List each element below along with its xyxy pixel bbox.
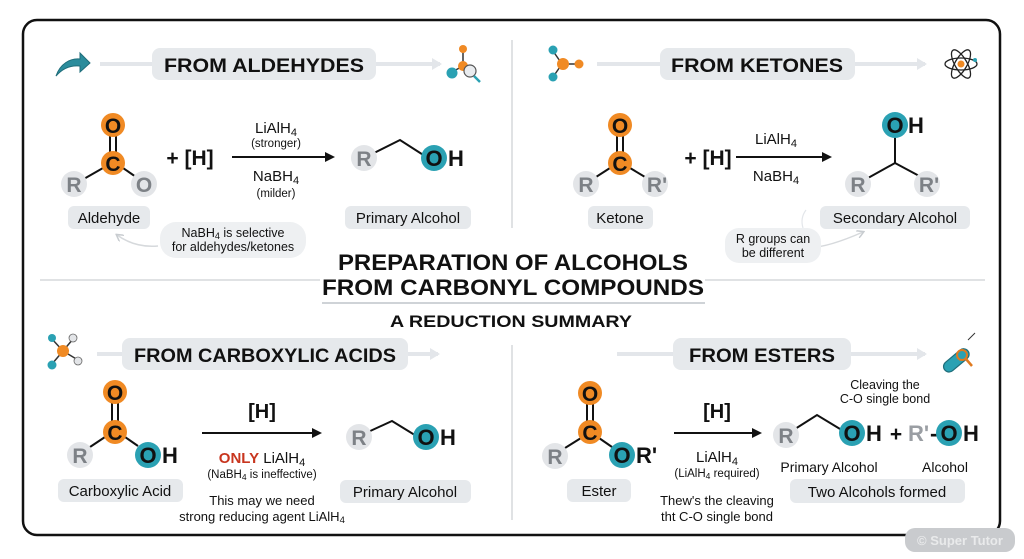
carboxylic acid molecule: C xyxy=(107,422,123,445)
ketone molecule xyxy=(573,113,668,197)
arrow: ester reduction: required) xyxy=(710,468,760,480)
arrow: acid reduction: 4 xyxy=(242,472,247,482)
aldehyde molecule: O xyxy=(105,115,121,138)
panel: esters xyxy=(542,333,979,524)
title: A REDUCTION SUMMARY xyxy=(390,312,633,331)
secondary alcohol molecule: O xyxy=(886,113,904,138)
primary alcohol molecule: R xyxy=(356,148,372,171)
ester molecule: R' xyxy=(636,443,657,468)
products: two alcohols xyxy=(773,415,979,475)
aldehyde molecule: R xyxy=(66,174,82,197)
heading: from esters xyxy=(673,338,851,370)
panel: ketones xyxy=(548,46,977,263)
arrow: ester reduction xyxy=(660,401,774,524)
products: two alcohols: Alcohol xyxy=(922,459,968,475)
text: cleaving note: Cleaving the xyxy=(850,378,920,392)
arrow: aldehyde reduction xyxy=(232,120,333,200)
arrow: acid reduction: This may we need xyxy=(209,493,315,508)
arrow: ester reduction: tht C-O single bond xyxy=(661,509,773,524)
callout: NaBH4 selective: is selective xyxy=(220,226,285,240)
products: two alcohols: H xyxy=(866,421,882,446)
callout: R groups can be different: be different xyxy=(742,246,805,260)
arrow: ester reduction: (LiAlH xyxy=(674,468,706,480)
ester molecule: O xyxy=(582,383,598,406)
products: two alcohols: R' xyxy=(908,421,929,446)
label: secondary alcohol xyxy=(820,206,970,229)
icon: test tube xyxy=(941,333,975,374)
callout: R groups can be different: R groups can xyxy=(736,232,810,246)
heading: from ketones xyxy=(660,48,855,80)
text: + [H]: + [H] xyxy=(166,147,214,170)
ketone molecule: O xyxy=(612,115,628,138)
arrow: acid reduction: 4 xyxy=(299,457,305,469)
label: aldehyde xyxy=(68,206,150,229)
callout: R groups can be different xyxy=(725,210,863,263)
heading: from aldehydes: FROM ALDEHYDES xyxy=(164,56,364,77)
panel: carboxylic acids xyxy=(48,334,471,526)
arrow: acid reduction: ONLY LiAlH xyxy=(219,450,299,467)
primary alcohol molecule xyxy=(351,140,464,171)
heading: from esters: FROM ESTERS xyxy=(689,346,835,367)
arrow: ketone reduction: 4 xyxy=(791,138,797,150)
heading: from carboxylic acids: FROM CARBOXYLIC ACIDS xyxy=(134,346,396,367)
arrow: ketone reduction xyxy=(736,131,830,187)
watermark: © Super Tutor xyxy=(917,533,1003,548)
label: primary alcohol xyxy=(345,206,471,229)
ketone molecule: R xyxy=(578,174,594,197)
label: carboxylic acid: Carboxylic Acid xyxy=(69,483,171,500)
carboxylic acid molecule: O xyxy=(107,382,123,405)
callout: NaBH4 selective xyxy=(117,222,306,258)
heading: from aldehydes xyxy=(152,48,376,80)
carboxylic acid molecule: O xyxy=(139,443,157,468)
arrow: aldehyde reduction: LiAlH xyxy=(255,120,291,137)
products: two alcohols: O xyxy=(940,421,958,446)
label: ketone xyxy=(588,206,653,229)
label: primary alcohol xyxy=(340,480,471,503)
icon: curved arrow xyxy=(56,53,90,76)
products: two alcohols: H xyxy=(963,421,979,446)
watermark xyxy=(905,528,1015,552)
title: FROM CARBONYL COMPOUNDS xyxy=(322,275,704,300)
callout: NaBH4 selective: for aldehydes/ketones xyxy=(172,240,294,254)
heading: from ketones: FROM KETONES xyxy=(671,56,843,77)
secondary alcohol molecule: R xyxy=(850,174,866,197)
icon: molecule magnifier xyxy=(446,45,480,82)
icon: molecule xyxy=(548,46,584,82)
secondary alcohol molecule xyxy=(845,112,940,197)
arrow: aldehyde reduction: 4 xyxy=(293,175,299,187)
ester molecule: C xyxy=(582,422,598,445)
ketone molecule: C xyxy=(612,153,628,176)
arrow: aldehyde reduction: 4 xyxy=(291,127,297,139)
callout: NaBH4 selective: 4 xyxy=(215,231,220,241)
label: two alcohols formed xyxy=(790,479,965,503)
primary alcohol molecule: H xyxy=(448,146,464,171)
label: ketone: Ketone xyxy=(596,210,644,227)
arrow: ketone reduction: 4 xyxy=(793,175,799,187)
text: cleaving note: C-O single bond xyxy=(840,392,930,406)
title: PREPARATION OF ALCOHOLS xyxy=(338,250,688,275)
primary alcohol molecule: O xyxy=(425,146,443,171)
arrow: acid reduction: (NaBH xyxy=(207,469,242,481)
title xyxy=(322,250,705,331)
products: two alcohols: R xyxy=(778,425,794,448)
primary alcohol molecule xyxy=(346,421,456,450)
label: secondary alcohol: Secondary Alcohol xyxy=(833,210,957,227)
arrow: ketone reduction: NaBH xyxy=(753,168,793,185)
primary alcohol molecule: H xyxy=(440,425,456,450)
arrow: acid reduction: is ineffective) xyxy=(247,469,317,481)
heading: from carboxylic acids xyxy=(122,338,408,370)
carboxylic acid molecule: R xyxy=(72,445,88,468)
icon: atom xyxy=(945,47,977,81)
label: ester: Ester xyxy=(581,483,617,500)
arrow: ester reduction: [H] xyxy=(703,401,731,423)
arrow: ester reduction: LiAlH xyxy=(696,449,732,466)
arrow: acid reduction xyxy=(179,401,345,526)
arrow: ester reduction: 4 xyxy=(732,456,738,468)
icon: molecule xyxy=(48,334,82,370)
aldehyde molecule: O xyxy=(136,174,152,197)
label: ester xyxy=(567,479,631,502)
label: primary alcohol: Primary Alcohol xyxy=(356,210,460,227)
aldehyde molecule xyxy=(61,113,157,197)
primary alcohol molecule: O xyxy=(417,425,435,450)
label: carboxylic acid xyxy=(58,479,183,502)
label: two alcohols formed: Two Alcohols formed xyxy=(808,484,946,501)
arrow: ketone reduction: LiAlH xyxy=(755,131,791,148)
products: two alcohols: + xyxy=(890,423,902,446)
aldehyde molecule: C xyxy=(105,153,121,176)
products: two alcohols: - xyxy=(930,421,937,446)
secondary alcohol molecule: H xyxy=(908,113,924,138)
text: + [H]: + [H] xyxy=(684,147,732,170)
ester molecule: R xyxy=(547,446,563,469)
text: cleaving note xyxy=(840,378,930,406)
label: aldehyde: Aldehyde xyxy=(78,210,140,227)
products: two alcohols: O xyxy=(843,421,861,446)
secondary alcohol molecule: R' xyxy=(919,174,939,197)
arrow: ester reduction: 4 xyxy=(706,471,711,481)
arrow: acid reduction: strong reducing agent LiAlH xyxy=(179,509,340,524)
arrow: acid reduction: 4 xyxy=(340,515,345,526)
products: two alcohols: Primary Alcohol xyxy=(780,459,878,475)
ketone molecule: R' xyxy=(647,174,667,197)
arrow: aldehyde reduction: (stronger) xyxy=(251,138,301,150)
arrow: ester reduction: Thew's the cleaving xyxy=(660,493,774,508)
callout: NaBH4 selective: NaBH xyxy=(182,226,215,240)
arrow: acid reduction: [H] xyxy=(248,401,276,423)
ester molecule xyxy=(542,381,657,469)
label: primary alcohol: Primary Alcohol xyxy=(353,484,457,501)
arrow: aldehyde reduction: (milder) xyxy=(257,188,296,200)
primary alcohol molecule: R xyxy=(351,427,367,450)
carboxylic acid molecule xyxy=(67,380,178,468)
ester molecule: O xyxy=(613,443,631,468)
carboxylic acid molecule: H xyxy=(162,443,178,468)
panel: aldehydes xyxy=(56,45,480,258)
arrow: aldehyde reduction: NaBH xyxy=(253,168,293,185)
